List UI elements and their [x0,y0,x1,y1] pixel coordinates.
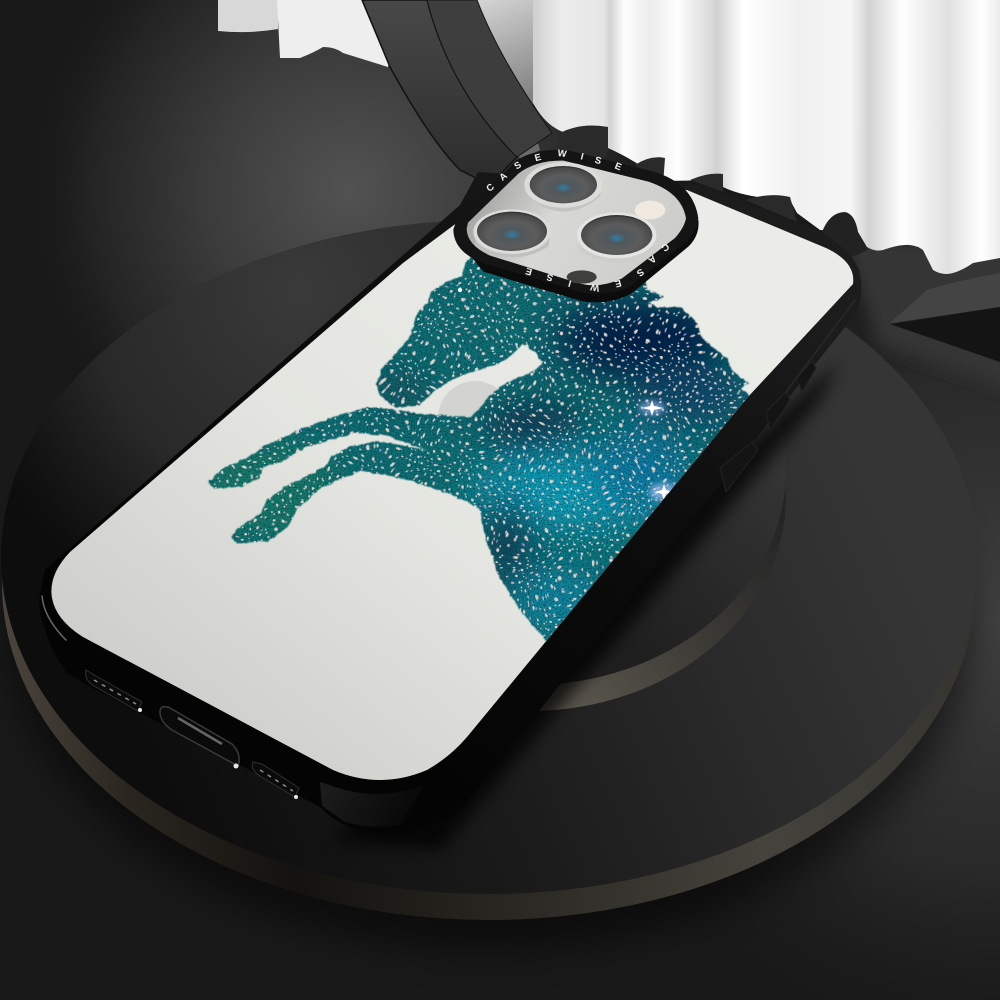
phone case body [39,172,861,833]
case edge highlights [42,300,855,640]
brand text on camera ring: E [614,277,622,289]
brand text on camera ring: E [534,152,542,164]
camera module [453,150,699,302]
horse galaxy silhouette [207,256,750,642]
brand text on camera ring: I [567,277,573,289]
brand text on camera ring: A [497,170,510,183]
brand text on camera ring: E [613,161,623,173]
curtain right [533,0,1000,274]
brand text on camera ring: C [659,241,671,254]
brand text on camera ring: A [646,253,658,266]
brand text on camera ring: S [512,160,524,172]
brand text on camera ring: S [634,266,646,278]
brand text on camera ring: S [545,271,555,283]
bottom speaker grille [86,670,142,712]
case corner gloss [320,782,425,827]
side buttons [720,361,816,492]
brand text on camera ring: S [594,155,602,167]
bottom speaker right [252,762,299,799]
bright stars [458,288,679,501]
sensor [567,270,597,284]
brand text on camera ring: I [579,151,585,163]
curtain left [218,0,400,67]
platform large disc [1,220,977,950]
brand text on camera ring: E [524,265,534,277]
lens right [577,212,656,262]
phone shadow [330,360,840,850]
charging port [160,707,239,768]
curtain shadow scallops [558,126,868,258]
phone back panel [51,190,853,780]
lens top [524,162,602,212]
platform small disc [274,255,786,711]
flash [635,201,665,219]
magsafe ring [438,381,498,418]
brand text on camera ring: W [590,281,600,293]
arch stand behind phone [362,0,552,185]
grey curtain behind arch [477,0,540,160]
dark stand right [890,273,1000,362]
brand text on camera ring: W [557,148,567,160]
brand text on camera ring: C [484,181,497,194]
brand text on camera ring [484,148,671,293]
lens left [473,209,551,257]
